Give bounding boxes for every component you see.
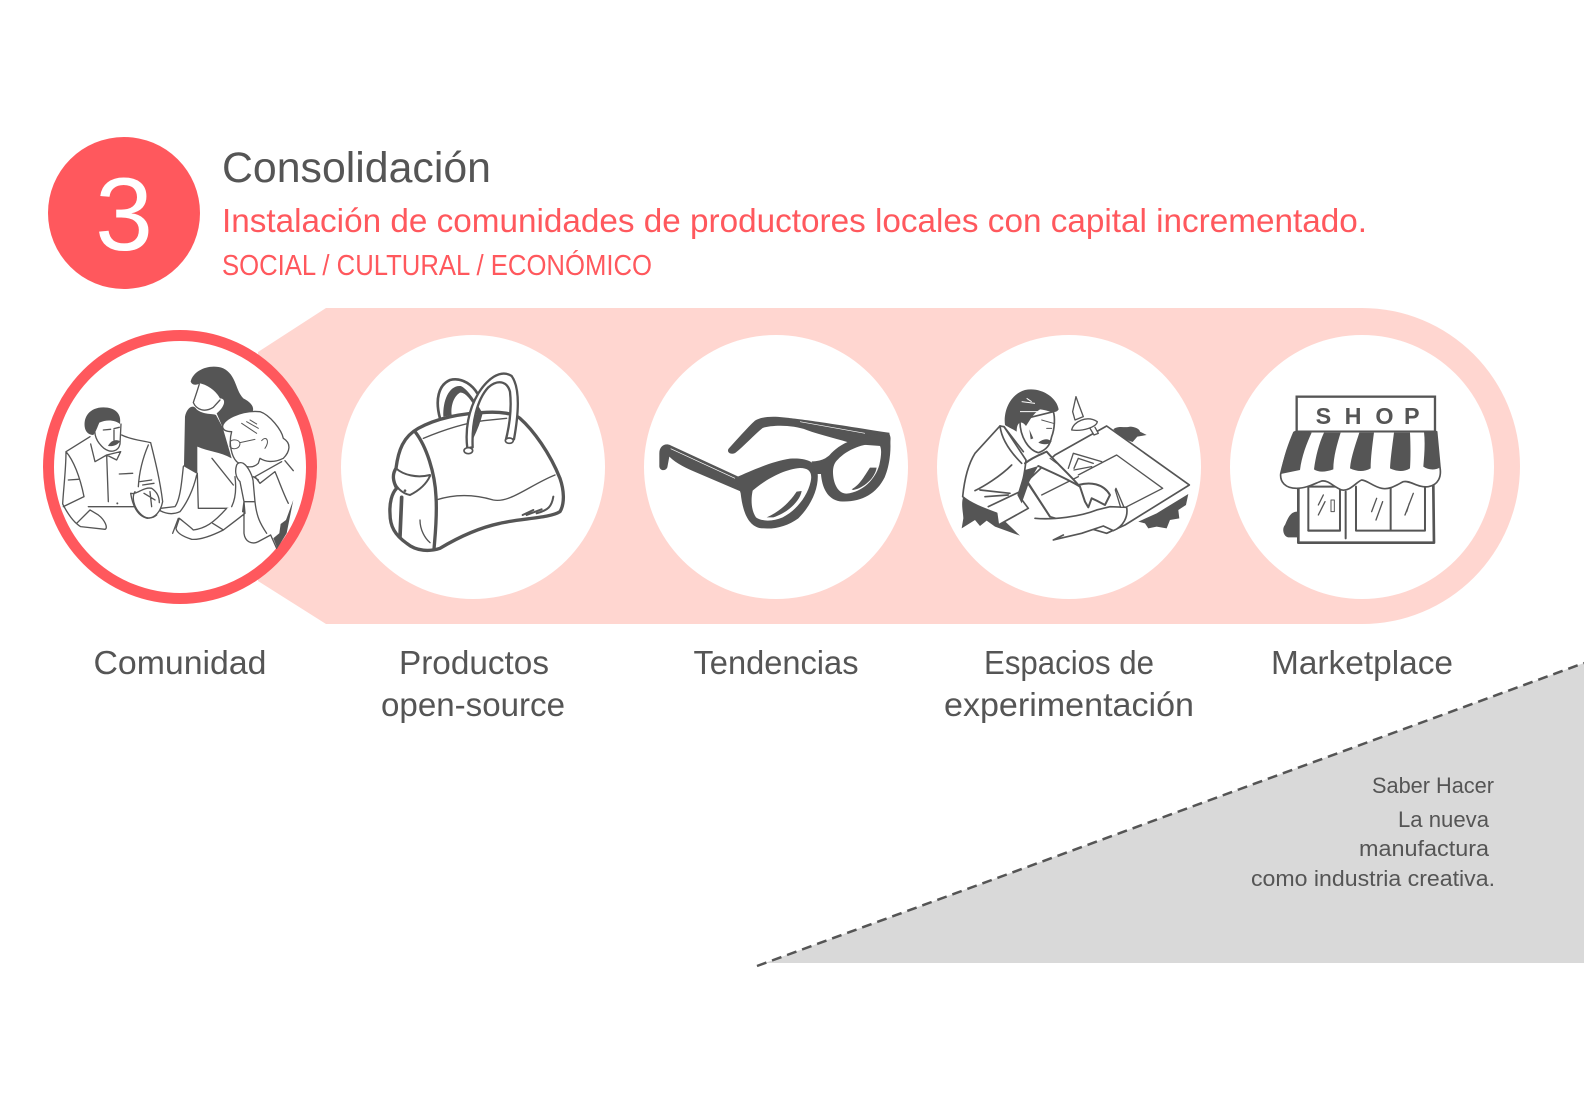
panel: tendencias	[644, 335, 908, 599]
white circle	[644, 335, 908, 599]
label: tendencias: Tendencias	[694, 644, 858, 681]
panel: comunidad	[48, 336, 312, 598]
label: espacios de experimentación: experimentación	[944, 686, 1194, 723]
icon: people at table	[63, 367, 293, 548]
category line: SOCIAL / CULTURAL / ECONÓMICO	[222, 249, 652, 282]
panel: marketplace	[1230, 335, 1494, 599]
white circle	[937, 335, 1201, 599]
icon: bag	[390, 374, 563, 550]
number badge	[48, 137, 200, 289]
number badge: 3	[95, 157, 153, 273]
label: productos open-source: open-source	[381, 686, 565, 723]
highlighted circle	[48, 336, 312, 598]
panel: productos open-source	[341, 335, 605, 599]
white circle	[341, 335, 605, 599]
icon: shop	[1281, 397, 1440, 543]
icon: draftsman	[962, 389, 1189, 540]
triangle: saber hacer	[757, 663, 1584, 966]
label: marketplace: Marketplace	[1271, 644, 1453, 681]
subtitle: Instalación de comunidades de productores locales con capital incrementado.	[222, 202, 1367, 239]
label: espacios de experimentación: Espacios de	[984, 644, 1154, 681]
text block: saber hacer: como industria creativa.	[1251, 866, 1495, 891]
title: Consolidación	[222, 144, 491, 192]
text block: saber hacer: manufactura	[1359, 836, 1490, 861]
label: productos open-source	[381, 644, 565, 723]
pink band	[258, 308, 1520, 624]
icon: glasses	[659, 417, 891, 529]
label: comunidad: Comunidad	[94, 644, 266, 681]
shop sign text: SHOP	[1316, 403, 1420, 429]
label: espacios de experimentación	[944, 644, 1194, 723]
text block: saber hacer: La nueva	[1398, 807, 1490, 832]
text block: saber hacer: Saber Hacer	[1372, 773, 1494, 798]
text block: saber hacer	[1251, 773, 1495, 891]
white circle	[1230, 335, 1494, 599]
label: productos open-source: Productos	[399, 644, 549, 681]
panel: espacios de experimentación	[937, 335, 1201, 599]
